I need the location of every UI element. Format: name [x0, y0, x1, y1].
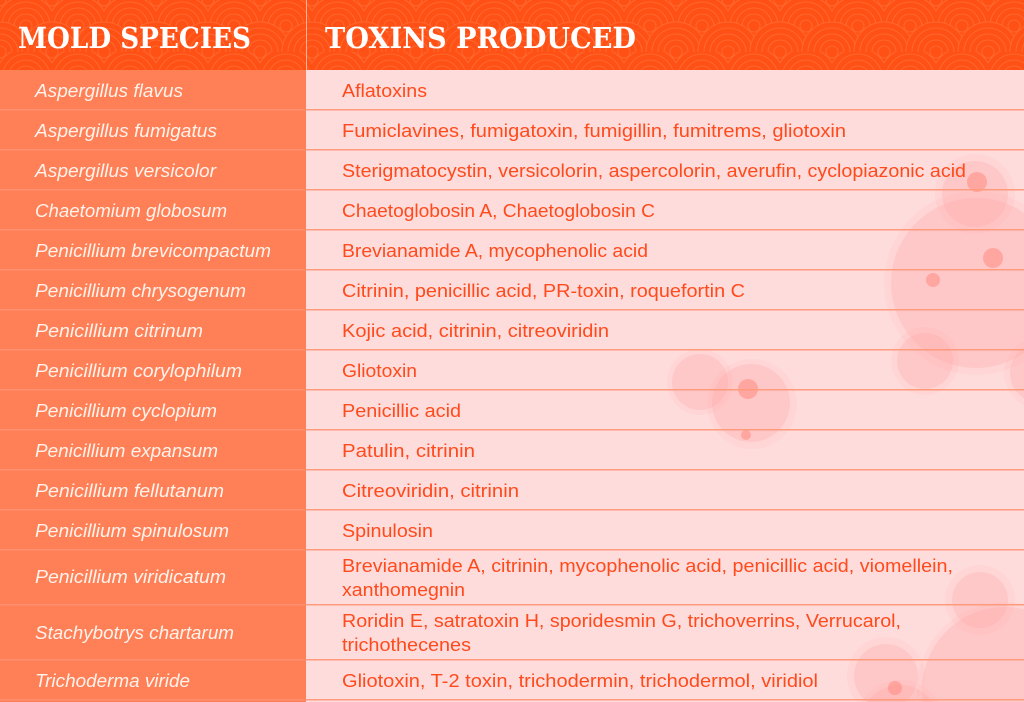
species name list: Penicillium cyclopium — [35, 401, 217, 421]
species name list — [34, 81, 271, 691]
panel: toxins column background — [306, 70, 1024, 702]
species name list: Penicillium spinulosum — [35, 521, 229, 541]
species name list: Penicillium corylophilum — [35, 361, 242, 381]
species name list: Aspergillus fumigatus — [34, 121, 217, 141]
toxins list: Brevianamide A, citrinin, mycophenolic acid, penicillic acid, viomellein, — [342, 556, 953, 576]
species name list: Penicillium fellutanum — [35, 481, 224, 501]
toxins list: trichothecenes — [342, 635, 471, 655]
toxins list: Aflatoxins — [342, 81, 427, 101]
species name list: Penicillium citrinum — [35, 321, 203, 341]
species name list: Stachybotrys chartarum — [35, 623, 234, 643]
heading: mold species: MOLD SPECIES — [18, 21, 251, 55]
toxins list: Gliotoxin, T-2 toxin, trichodermin, trichodermol, viridiol — [342, 671, 818, 691]
toxins list — [342, 81, 966, 691]
species name list: Aspergillus versicolor — [34, 161, 217, 181]
panel: species column background — [0, 70, 306, 702]
toxins list: Citreoviridin, citrinin — [342, 481, 519, 501]
species name list: Chaetomium globosum — [35, 201, 227, 221]
toxins list: Gliotoxin — [342, 361, 417, 381]
species name list: Penicillium expansum — [35, 441, 218, 461]
decorative mold bubbles — [667, 154, 1024, 702]
species name list: Aspergillus flavus — [34, 81, 183, 101]
toxins list: Patulin, citrinin — [342, 441, 475, 461]
toxins list: Spinulosin — [342, 521, 433, 541]
species name list: Trichoderma viride — [35, 671, 190, 691]
species name list: Penicillium brevicompactum — [35, 241, 271, 261]
toxins list: Chaetoglobosin A, Chaetoglobosin C — [342, 201, 655, 221]
header band — [0, 0, 1024, 70]
toxins list: Kojic acid, citrinin, citreoviridin — [342, 321, 609, 341]
toxins list: Penicillic acid — [342, 401, 461, 421]
toxins list: Roridin E, satratoxin H, sporidesmin G, trichoverrins, Verrucarol, — [342, 611, 901, 631]
species name list: Penicillium viridicatum — [35, 567, 226, 587]
toxins list: Fumiclavines, fumigatoxin, fumigillin, fumitrems, gliotoxin — [342, 121, 846, 141]
toxins list: Brevianamide A, mycophenolic acid — [342, 241, 648, 261]
toxins list: Citrinin, penicillic acid, PR-toxin, roquefortin C — [342, 281, 745, 301]
toxins list: Sterigmatocystin, versicolorin, aspercolorin, averufin, cyclopiazonic acid — [342, 161, 966, 181]
species name list: Penicillium chrysogenum — [35, 281, 246, 301]
heading: toxins produced: TOXINS PRODUCED — [325, 21, 636, 55]
toxins list: xanthomegnin — [342, 580, 465, 600]
